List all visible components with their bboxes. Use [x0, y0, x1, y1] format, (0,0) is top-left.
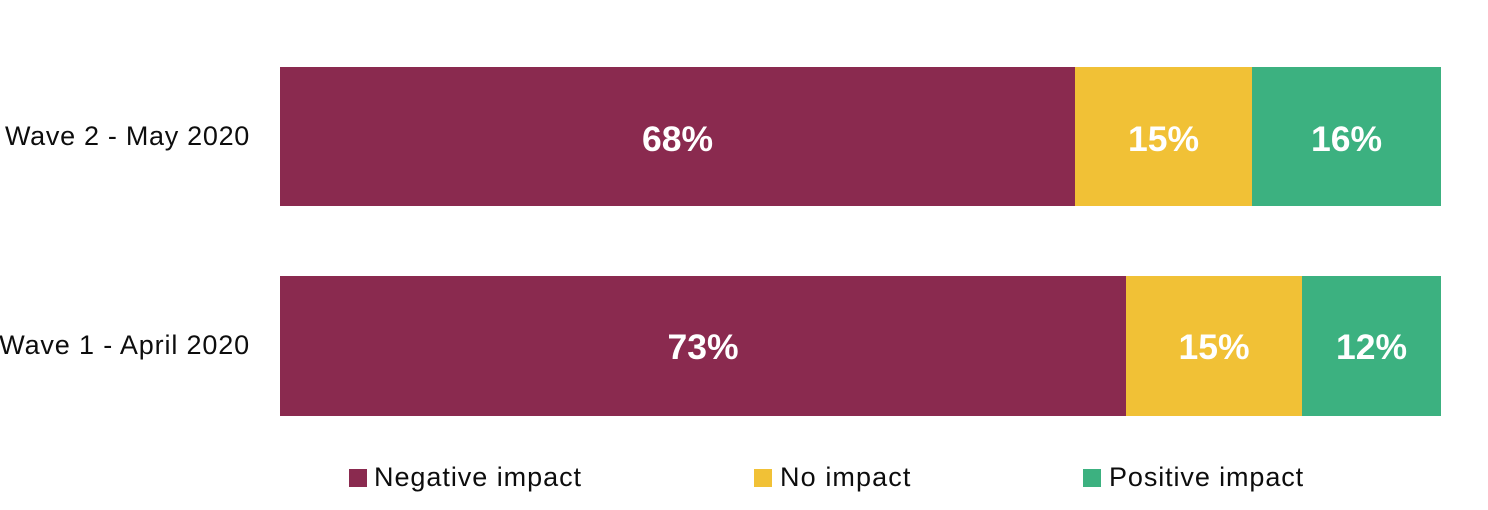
bar: Wave 2 positive impact 16%: 16% — [1311, 119, 1382, 159]
bar: Wave 1 no impact 15%: 15% — [1178, 327, 1250, 367]
bar: Wave 1 negative impact 73%: 73% — [667, 327, 739, 367]
legend: positive impact: Positive impact — [1109, 462, 1304, 492]
bar: Wave 2 no impact 15%: 15% — [1128, 119, 1199, 159]
bar: Wave 2 negative impact 68%: 68% — [642, 119, 713, 159]
bar: Wave 1 negative impact 73% — [280, 276, 1126, 416]
legend: negative impact: Negative impact — [374, 462, 582, 492]
bar: Wave 2 positive impact 16% — [1252, 67, 1441, 206]
bar: Wave 1 no impact 15% — [1126, 276, 1302, 416]
bar: Wave 2 negative impact 68% — [280, 67, 1075, 206]
row label: Wave 1: Wave 1 - April 2020 — [0, 330, 250, 360]
bar: Wave 1 positive impact 12%: 12% — [1336, 327, 1407, 367]
legend: no impact: No impact — [780, 462, 911, 492]
row label: Wave 2: Wave 2 - May 2020 — [5, 121, 250, 151]
bar: Wave 1 positive impact 12% — [1302, 276, 1441, 416]
bar: Wave 2 no impact 15% — [1075, 67, 1252, 206]
